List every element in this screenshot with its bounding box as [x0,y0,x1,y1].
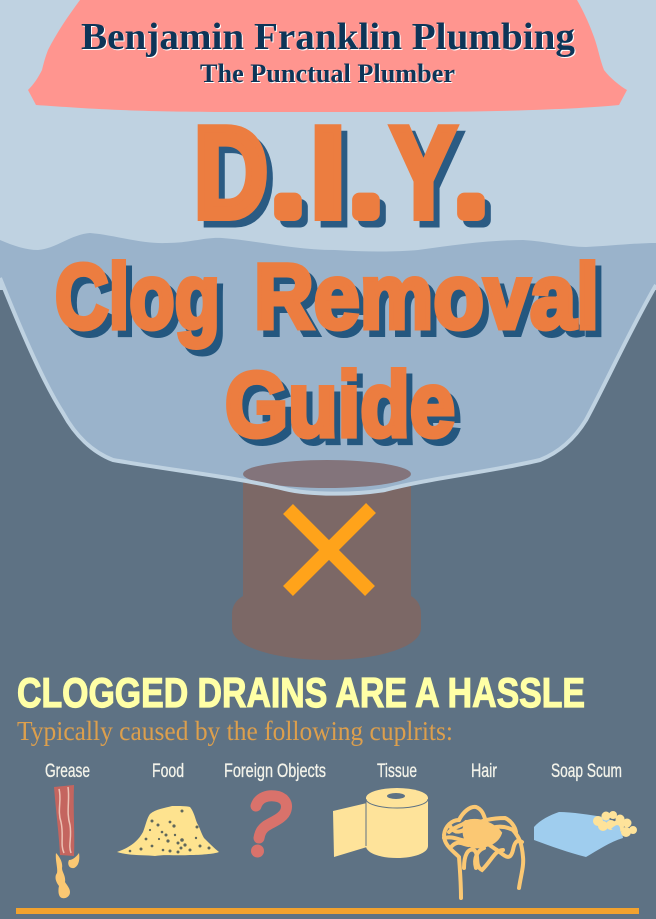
icon: orange X over drain [288,508,371,591]
icon: soap bar with foam [534,811,637,857]
icon: tangled hair [444,807,523,898]
pipe drain cylinder [232,473,421,660]
heading: company name: Benjamin Franklin Plumbing [82,17,576,59]
title: Guide: Guide [231,360,461,462]
label: Food: Food [152,761,184,782]
drain opening ellipse [243,460,411,488]
title: D.I.Y.: . [464,140,490,240]
title: D.I.Y.: . [282,140,307,240]
label: Foreign Objects: Foreign Objects [224,761,326,782]
divider rule [16,908,639,914]
water in the sink bowl [0,233,656,494]
label: Tissue: Tissue [377,761,417,782]
icon: food pile [117,806,219,856]
title: Clog Removal: Clog [61,252,226,354]
title: D.I.Y.: . [360,140,385,240]
title: D.I.Y. [194,101,490,252]
title: Clog Removal: Clog [55,246,220,348]
title: D.I.Y.: D [194,101,268,245]
title: Guide: Guide [225,354,455,456]
bowl rim highlight [0,278,656,494]
label: Grease: Grease [45,761,90,782]
title: D.I.Y.: . [458,134,484,234]
title: D.I.Y.: Y [391,101,456,245]
icon: bacon with dripping grease [54,785,79,898]
title: D.I.Y.: D [200,108,274,252]
heading: tagline: The Punctual Plumber [200,59,455,88]
title: Clog Removal: Removal [260,252,605,354]
icon: tissue roll [333,788,428,858]
title: D.I.Y.: I [310,101,346,245]
heading: tagline: The Punctual Plumber [201,60,456,89]
heading: company name: Benjamin Franklin Plumbing [81,16,575,58]
label: Soap Scum: Soap Scum [551,761,622,782]
title: D.I.Y.: I [316,108,352,252]
title: D.I.Y.: Y [397,108,462,252]
title: Clog Removal [55,246,605,354]
label: Hair: Hair [471,761,497,782]
section subheading: Typically caused by the following cuplrits: [17,716,453,746]
title: D.I.Y.: . [276,134,301,234]
title: D.I.Y.: . [354,134,379,234]
icon: question mark [251,796,287,858]
header banner [28,0,627,112]
title: Clog Removal: Removal [254,246,599,348]
